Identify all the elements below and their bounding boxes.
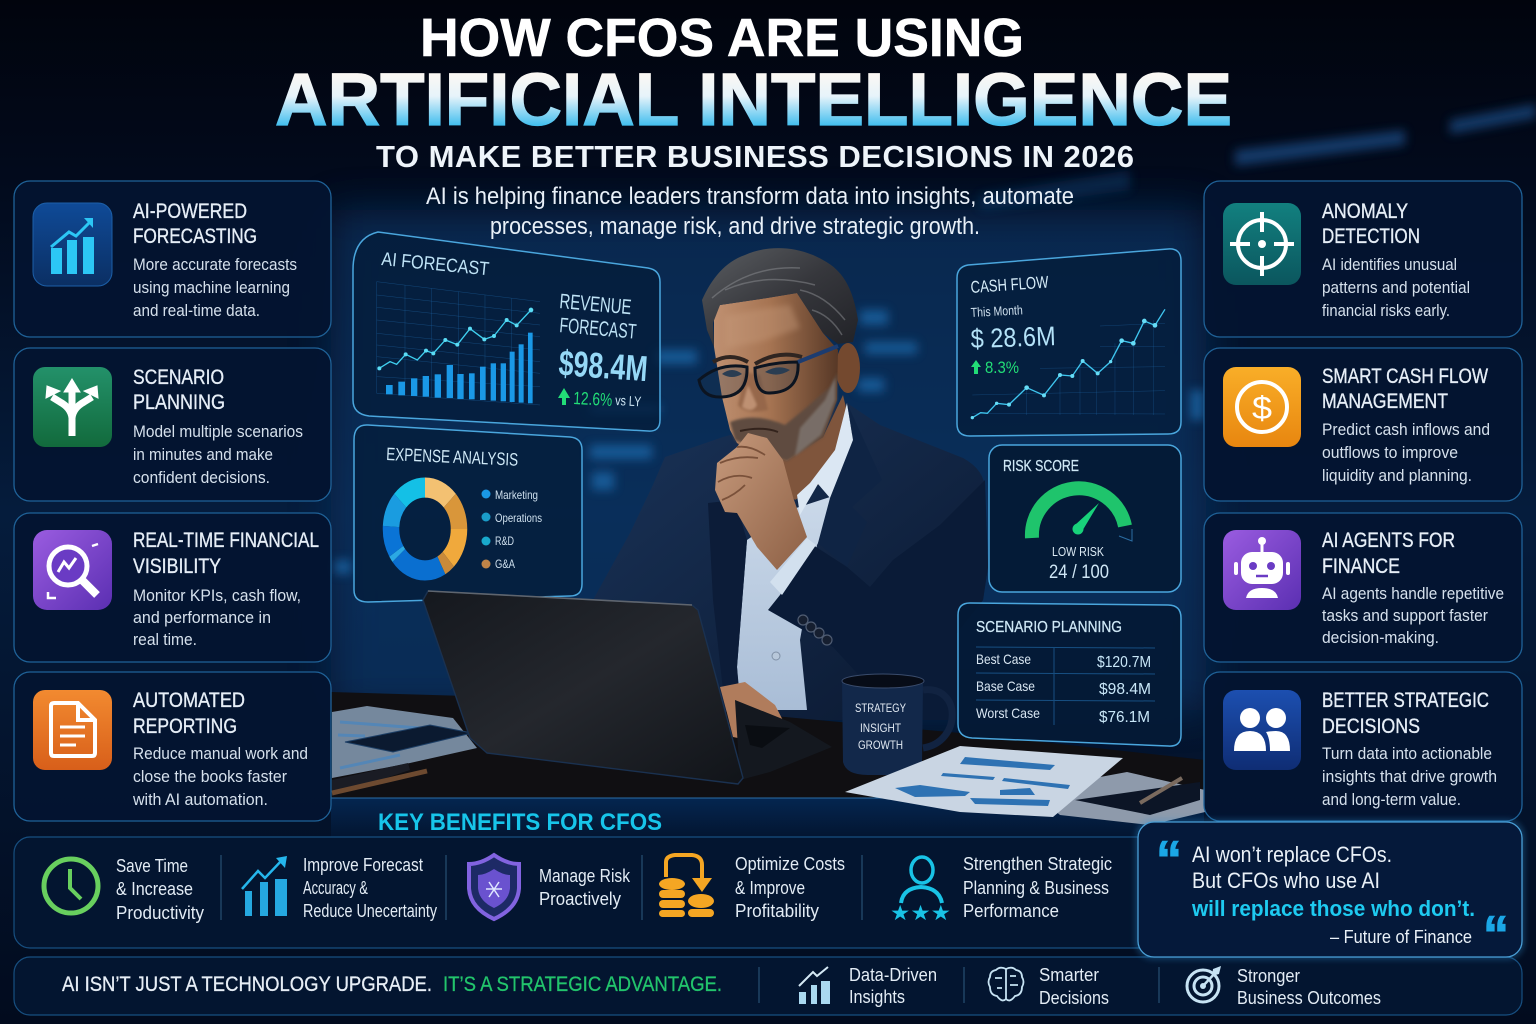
benefit: manage risk: Proactively <box>539 889 621 909</box>
benefit: strategic planning: Performance <box>963 901 1059 921</box>
sleeve <box>768 480 988 720</box>
scenario table: Best Case <box>976 651 1031 667</box>
risk value: 24 / 100 <box>1049 562 1109 583</box>
card text: MANAGEMENT <box>1322 390 1448 413</box>
beard <box>730 373 837 461</box>
card text: and long-term value. <box>1322 791 1461 809</box>
card text: REAL-TIME FINANCIAL <box>133 529 319 552</box>
card text: AI AGENTS FOR <box>1322 529 1455 552</box>
scenario table <box>976 651 1151 726</box>
desk <box>331 692 1205 798</box>
card text <box>1322 200 1470 320</box>
benefit: forecast accuracy: Accuracy & <box>303 878 368 898</box>
benefit: manage risk: Manage Risk <box>539 866 631 886</box>
line chart <box>971 309 1165 419</box>
smarter decisions: Smarter <box>1039 965 1099 985</box>
hair strands <box>712 268 845 335</box>
band below desk <box>331 798 1204 838</box>
card text: FORECASTING <box>133 225 257 248</box>
smarter decisions <box>988 965 1109 1008</box>
scenario table: Worst Case <box>976 705 1040 721</box>
card text: with AI automation. <box>132 791 268 809</box>
benefit: strategic planning: Strengthen Strategic <box>963 854 1112 874</box>
eyes <box>722 367 790 377</box>
revenue value: $98.4M <box>557 342 649 389</box>
donut legend: Operations <box>495 511 542 525</box>
heading: RISK SCORE <box>1003 458 1079 475</box>
donut legend: G&A <box>495 557 515 571</box>
table lines <box>976 647 1155 725</box>
card text: AI-POWERED <box>133 200 247 223</box>
benefit: forecast accuracy: Improve Forecast <box>303 855 423 875</box>
panel: cash flow <box>957 249 1181 436</box>
subtitle: AI is helping finance leaders transform data into insights, automate <box>426 183 1074 210</box>
benefit: optimize costs <box>659 854 845 921</box>
card text: liquidity and planning. <box>1322 467 1472 485</box>
title: How CFOs are using: HOW CFOS ARE USING <box>420 8 1024 68</box>
stronger outcomes: Business Outcomes <box>1237 988 1381 1008</box>
donut legend: Marketing <box>495 488 538 502</box>
card text: Reduce manual work and <box>133 745 308 763</box>
mug: STRATEGY <box>855 701 906 715</box>
benefit: save time: Productivity <box>116 903 204 923</box>
data-driven insights: Insights <box>849 987 905 1007</box>
icon: diverging arrows <box>33 367 112 447</box>
shirt collar <box>797 403 853 515</box>
revenue forecast label: REVENUE <box>559 290 632 319</box>
card text: VISIBILITY <box>133 555 221 578</box>
mug: GROWTH <box>858 738 903 752</box>
card text: More accurate forecasts <box>133 256 297 274</box>
card text: DECISIONS <box>1322 715 1420 738</box>
panel: expense analysis <box>354 425 582 602</box>
card text: and performance in <box>133 609 271 627</box>
cash growth <box>971 358 1019 377</box>
heading: CASH FLOW <box>970 273 1049 297</box>
heading: AI FORECAST <box>381 249 490 280</box>
card text: DETECTION <box>1322 225 1420 248</box>
risk label: LOW RISK <box>1052 544 1104 559</box>
banner statement: AI ISN’T JUST A TECHNOLOGY UPGRADE. <box>62 973 432 996</box>
card text <box>133 200 297 320</box>
document: right desk report <box>845 746 1205 825</box>
quote text: AI won’t replace CFOs. <box>1192 842 1392 867</box>
right lapel <box>818 403 882 567</box>
person: CFO <box>593 248 988 720</box>
card: better strategic decisions <box>1204 672 1522 821</box>
card text: close the books faster <box>133 768 287 786</box>
subtitle <box>426 183 1074 240</box>
title: to make better business decisions: TO MAKE BETTER BUSINESS DECISIONS IN 2026 <box>376 139 1134 174</box>
growth <box>558 388 642 410</box>
jacket <box>593 403 988 720</box>
laptop <box>423 591 832 784</box>
mug <box>842 674 952 775</box>
quote mark close: “ <box>1483 906 1509 964</box>
shirt <box>737 403 856 710</box>
shirt cuff <box>770 538 816 595</box>
revenue forecast label <box>559 290 637 344</box>
combo chart <box>377 282 540 405</box>
panel: benefits strip <box>14 837 1214 948</box>
forehead light <box>725 305 800 348</box>
panel: scenario planning <box>958 603 1181 746</box>
data-driven insights: Data-Driven <box>849 965 937 985</box>
subtitle: processes, manage risk, and drive strategic growth. <box>490 213 980 240</box>
card text <box>132 689 308 809</box>
jacket buttons <box>798 615 832 645</box>
benefit: optimize costs: Optimize Costs <box>735 854 845 874</box>
card text: and real-time data. <box>133 302 260 320</box>
moustache line <box>740 429 778 432</box>
donut legend: R&D <box>495 534 514 548</box>
panel: bottom banner <box>14 957 1522 1015</box>
stronger outcomes: Stronger <box>1237 966 1300 986</box>
donut legend <box>482 488 542 571</box>
card text: insights that drive growth <box>1322 768 1497 786</box>
scenario table: $76.1M <box>1099 709 1150 726</box>
card: anomaly detection <box>1204 181 1522 337</box>
card text: financial risks early. <box>1322 302 1450 320</box>
grey stubble <box>795 378 835 456</box>
scenario table: $98.4M <box>1099 681 1151 698</box>
card text: patterns and potential <box>1322 279 1470 297</box>
growth: 12.6% <box>573 388 613 410</box>
heading: SCENARIO PLANNING <box>976 619 1122 636</box>
icon: dollar coin: $ <box>1252 390 1272 426</box>
panel: risk score <box>989 445 1181 592</box>
icon: magnifier <box>33 530 112 610</box>
card: automated reporting <box>14 672 331 821</box>
icon: robot <box>1223 530 1301 610</box>
benefit: optimize costs: Profitability <box>735 901 819 921</box>
cash growth: 8.3% <box>985 358 1019 377</box>
card text: PLANNING <box>133 391 225 414</box>
heading: key benefits: KEY BENEFITS FOR CFOS <box>378 809 662 836</box>
nose highlight <box>742 385 757 410</box>
scenario table: $120.7M <box>1097 654 1151 671</box>
quote text: will replace those who don’t. <box>1191 896 1475 921</box>
ear <box>836 343 860 393</box>
benefit: save time <box>44 856 204 923</box>
card text: Predict cash inflows and <box>1322 421 1490 439</box>
hand on chin <box>715 433 807 570</box>
banner statement: IT’S A STRATEGIC ADVANTAGE. <box>443 973 722 996</box>
card text: Monitor KPIs, cash flow, <box>133 587 301 605</box>
card text: SMART CASH FLOW <box>1322 365 1488 388</box>
quote mark open: “ <box>1156 831 1182 889</box>
card text: Model multiple scenarios <box>133 423 303 441</box>
card text: REPORTING <box>133 715 237 738</box>
dividers <box>221 855 862 920</box>
card text: FINANCE <box>1322 555 1400 578</box>
card text: outflows to improve <box>1322 444 1458 462</box>
benefit: strategic planning <box>890 854 1112 925</box>
quote text: – Future of Finance <box>1330 927 1472 947</box>
quote text: But CFOs who use AI <box>1192 868 1380 893</box>
shirt button <box>772 652 780 660</box>
card text: AI identifies unusual <box>1322 256 1457 274</box>
card text <box>1322 529 1504 647</box>
benefit: forecast accuracy: Reduce Unecertainty <box>303 901 437 921</box>
stronger outcomes <box>1187 966 1381 1008</box>
neck <box>737 395 852 500</box>
card text: AUTOMATED <box>133 689 245 712</box>
panel: AI forecast <box>353 232 660 431</box>
card: smart cash flow <box>1204 348 1522 501</box>
card: AI-powered forecasting <box>14 181 331 337</box>
card: scenario planning <box>14 348 331 501</box>
benefit: save time: Save Time <box>116 856 188 876</box>
card text: SCENARIO <box>133 366 224 389</box>
document: left desk papers <box>332 706 477 796</box>
callout: quote <box>1135 819 1525 964</box>
period label: This Month <box>970 302 1023 320</box>
heading: EXPENSE ANALYSIS <box>386 444 519 470</box>
card text: in minutes and make <box>133 446 273 464</box>
glasses <box>699 362 798 397</box>
card text: AI agents handle repetitive <box>1322 585 1504 603</box>
card text: ANOMALY <box>1322 200 1408 223</box>
card text: real time. <box>133 631 197 649</box>
card text: using machine learning <box>133 279 290 297</box>
dividers <box>759 967 1159 1003</box>
left lapel <box>708 500 747 700</box>
benefit: manage risk <box>469 855 631 919</box>
card text <box>1322 365 1490 485</box>
benefit: strategic planning: Planning & Business <box>963 878 1109 898</box>
nose shadow <box>738 372 768 412</box>
hand on laptop <box>720 682 788 740</box>
cash value: $ 28.6M <box>970 321 1056 354</box>
hair <box>702 248 858 347</box>
benefit: save time: & Increase <box>116 879 193 899</box>
card text <box>1322 689 1497 809</box>
icon: growth chart <box>33 203 112 286</box>
glasses temple <box>798 346 838 362</box>
title: Artificial Intelligence: ARTIFICIAL INTELLIGENCE <box>275 58 1232 141</box>
mug: INSIGHT <box>860 721 902 735</box>
banner statement <box>62 973 722 996</box>
card: AI agents <box>1204 513 1522 662</box>
gauge <box>1032 488 1132 541</box>
icon: dollar coin <box>1223 367 1301 447</box>
eyebrows <box>713 355 802 364</box>
donut chart <box>391 488 459 570</box>
quote text <box>1191 842 1475 947</box>
growth: vs LY <box>615 392 642 409</box>
benefit: strategic planning: ★★★ <box>890 902 951 925</box>
benefit: forecast accuracy <box>242 855 437 921</box>
card text: confident decisions. <box>133 469 270 487</box>
face <box>714 293 838 461</box>
icon: document <box>33 690 112 770</box>
card text: BETTER STRATEGIC <box>1322 689 1489 712</box>
card text: decision-making. <box>1322 629 1439 647</box>
knuckle lines <box>718 447 765 500</box>
scenario table: Base Case <box>976 678 1035 694</box>
revenue forecast label: FORECAST <box>559 314 637 344</box>
card text <box>133 529 319 649</box>
data-driven insights <box>799 965 937 1007</box>
card text: tasks and support faster <box>1322 607 1488 625</box>
card text: Turn data into actionable <box>1322 745 1492 763</box>
card: real-time visibility <box>14 513 331 662</box>
icon: crosshair <box>1223 203 1301 285</box>
icon: people <box>1223 690 1301 770</box>
smarter decisions: Decisions <box>1039 988 1109 1008</box>
benefit: optimize costs: & Improve <box>735 878 805 898</box>
card text <box>133 366 303 487</box>
